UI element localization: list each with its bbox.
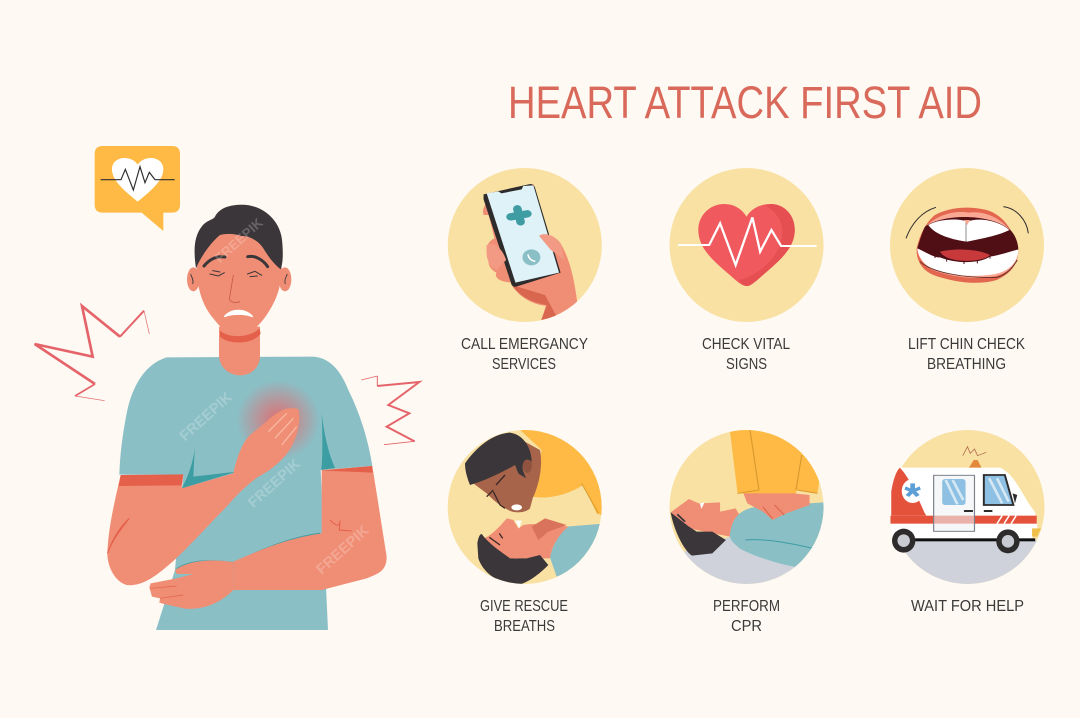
victim hair <box>477 534 548 585</box>
call circle icon <box>448 168 602 322</box>
shirt watermarks: FREEPIK <box>314 523 373 578</box>
cheek lines <box>906 207 1028 238</box>
face watermark: FREEPIK <box>212 215 266 266</box>
mouth circle icon <box>890 168 1044 322</box>
vital label: CHECK VITAL <box>702 336 790 353</box>
panel: check vital signs <box>670 168 824 373</box>
rescue label: GIVE RESCUE <box>480 598 568 615</box>
ambulance circle icon <box>890 430 1047 585</box>
illustration: man having a heart attack <box>35 146 419 630</box>
call label second line: SERVICES <box>492 356 556 373</box>
shirt <box>119 357 372 630</box>
panel: perform cpr <box>670 430 825 635</box>
ambulance <box>890 447 1041 553</box>
left pain zigzag <box>35 306 149 401</box>
heart circle icon <box>670 168 824 322</box>
vital label second line: SIGNS <box>726 356 767 373</box>
nose <box>229 275 240 302</box>
cpr label second line: CPR <box>731 618 762 635</box>
panel: lift chin check breathing <box>890 168 1044 373</box>
victim skin <box>483 518 568 558</box>
hair <box>195 205 283 269</box>
breathing label second line: BREATHING <box>927 356 1006 373</box>
head of the man <box>187 205 291 343</box>
lower teeth <box>917 248 1018 276</box>
lower hand <box>149 561 233 609</box>
shirt watermarks: FREEPIK <box>177 389 236 445</box>
panel: wait for help <box>890 430 1047 615</box>
eyebrows and closed eyes <box>204 256 268 277</box>
mouth cavity <box>917 217 1018 265</box>
rescuer face <box>473 440 541 512</box>
face <box>197 233 282 335</box>
shirt watermarks <box>177 389 373 578</box>
cpr label: PERFORM <box>713 598 780 615</box>
right pain zigzag <box>361 376 419 445</box>
rescuer shirt <box>520 430 602 515</box>
title: HEART ATTACK FIRST AID <box>508 77 982 128</box>
mouth <box>224 310 253 317</box>
shirt watermarks: FREEPIK <box>245 456 304 511</box>
neck shadow <box>220 328 261 343</box>
right arm with sleeve band <box>233 466 387 590</box>
rescue breaths circle icon <box>448 428 607 585</box>
rescuer features <box>487 475 505 508</box>
chest pain glow <box>237 380 320 460</box>
speech bubble with heart <box>95 146 180 231</box>
lips <box>917 208 1018 283</box>
inner lip <box>917 212 1018 278</box>
lower lip line <box>920 260 1017 277</box>
victim helper hand <box>532 518 567 540</box>
tongue <box>940 249 990 261</box>
ears <box>187 267 291 291</box>
rescue label second line: BREATHS <box>494 618 555 635</box>
rescuer ear <box>522 460 532 473</box>
breathing label: LIFT CHIN CHECK <box>908 336 1026 353</box>
infographic canvas <box>34 86 1044 631</box>
shirt fold shadows <box>175 413 335 569</box>
wait label: WAIT FOR HELP <box>911 598 1024 615</box>
cpr circle icon <box>670 430 825 585</box>
neck <box>219 327 260 375</box>
call label: CALL EMERGANCY <box>461 336 588 353</box>
panel: call emergency services <box>448 168 602 373</box>
left arm raised to chest <box>107 408 299 585</box>
panel: give rescue breaths <box>448 428 607 635</box>
upper teeth <box>928 219 1009 242</box>
rescuer hair <box>465 433 532 485</box>
victim shirt <box>550 524 600 576</box>
ear inner lines <box>191 274 287 284</box>
